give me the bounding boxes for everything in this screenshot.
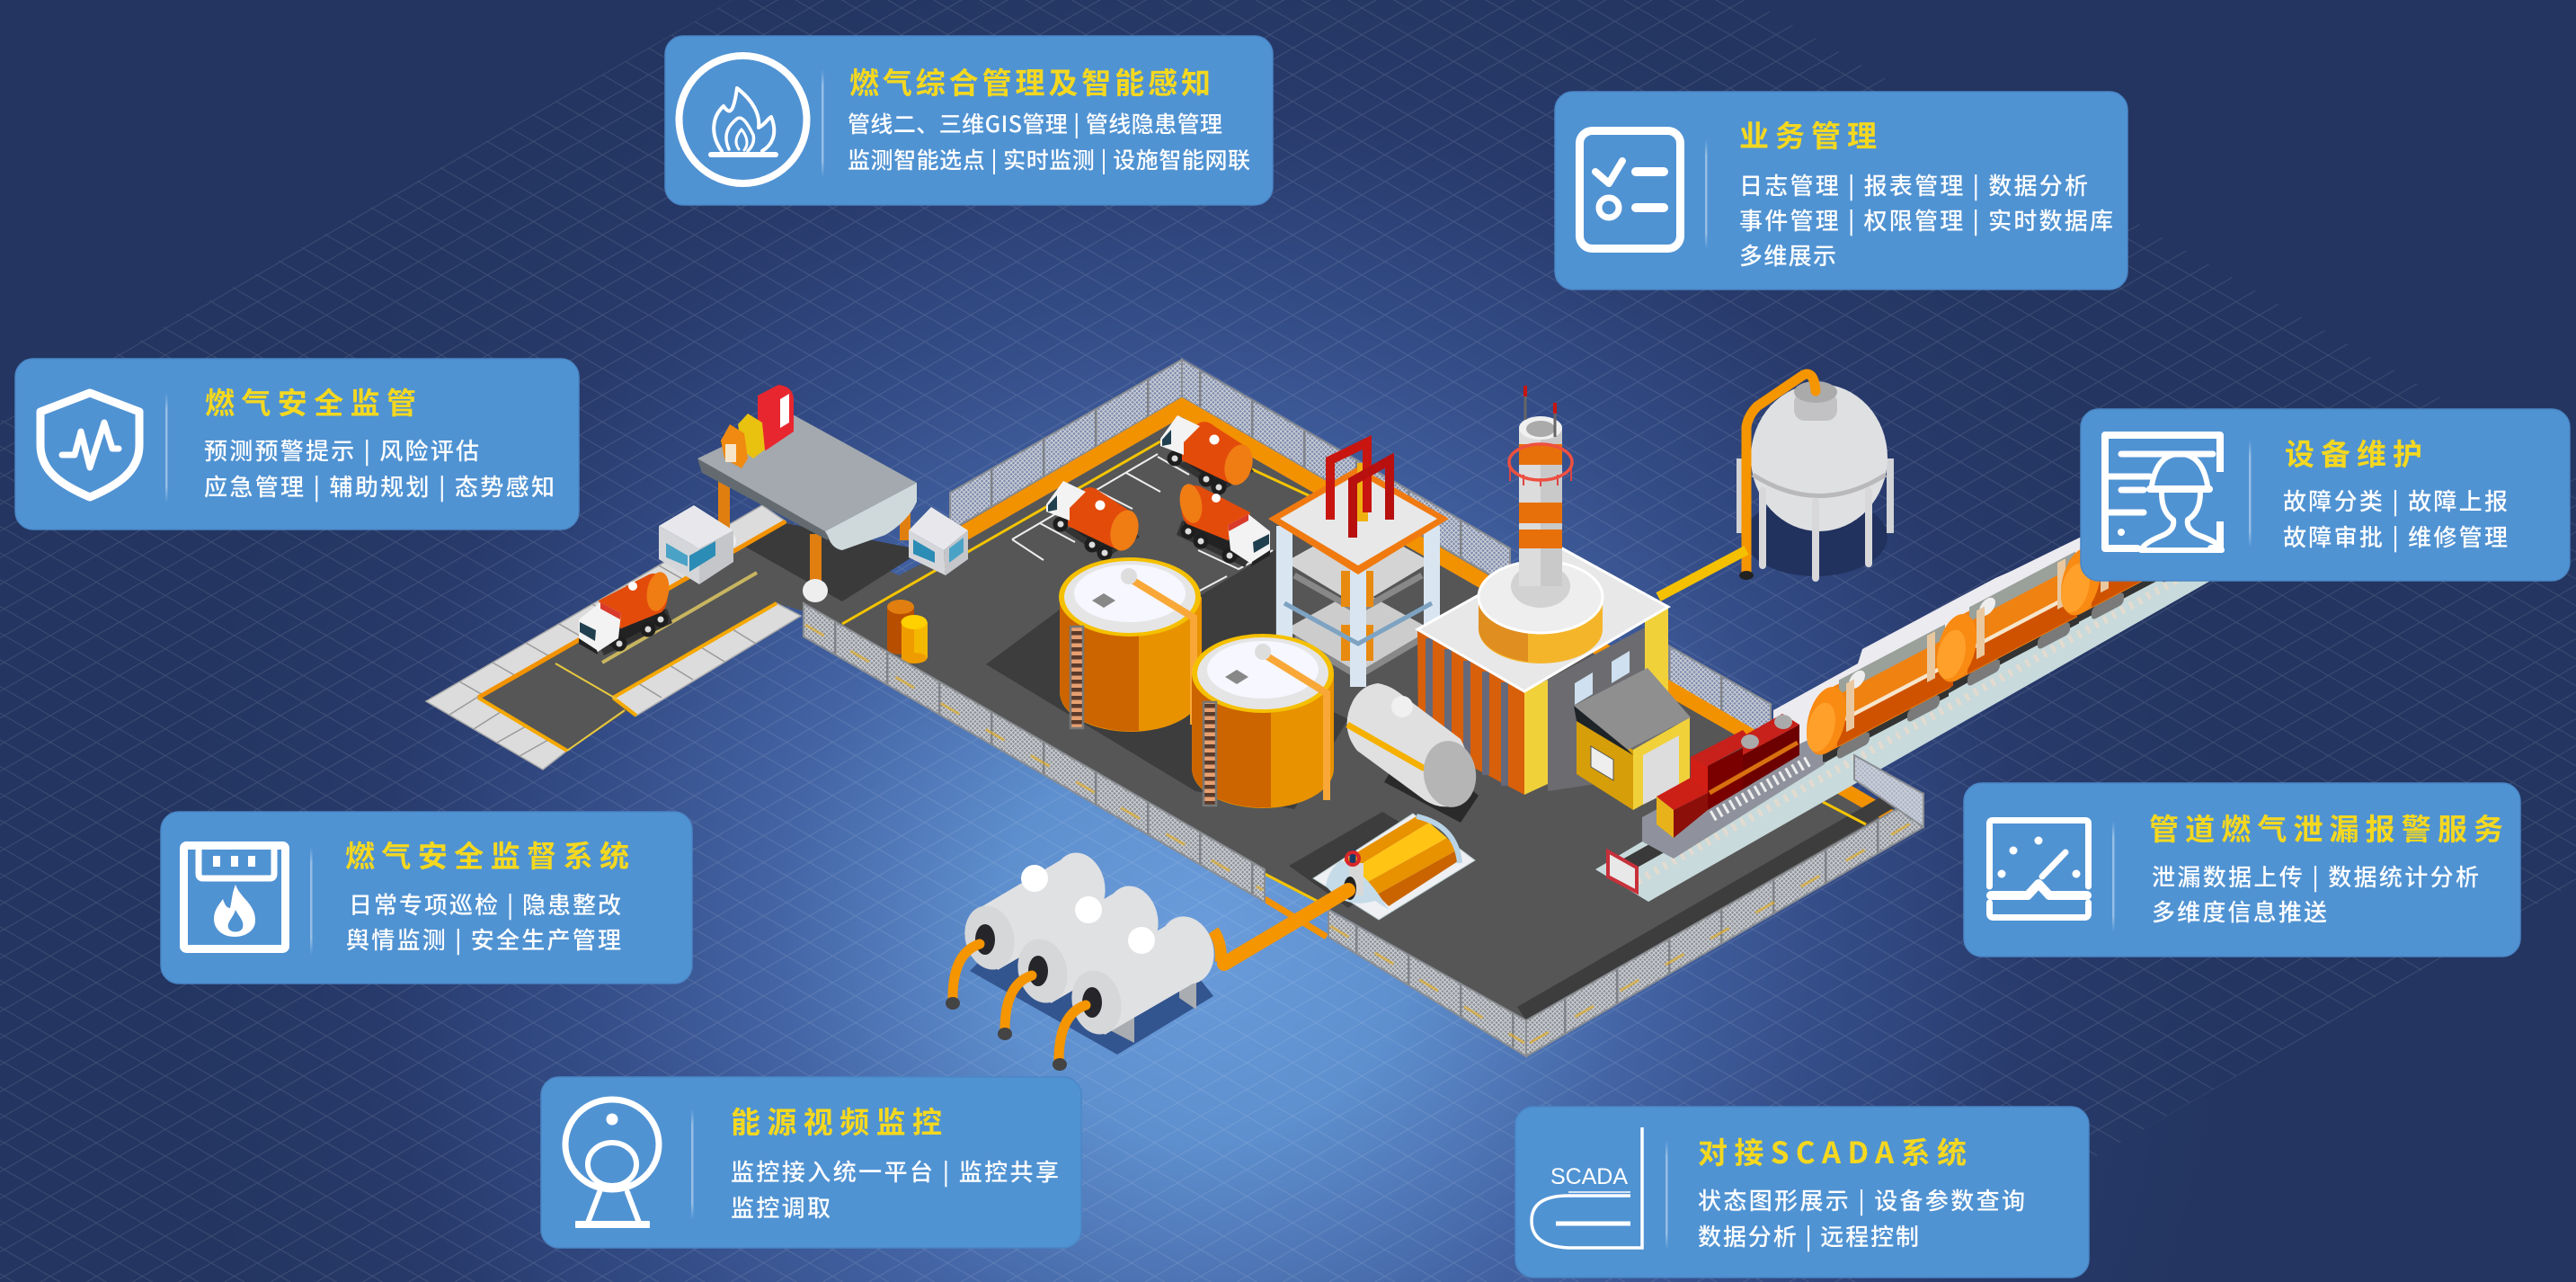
ground platform and road (478, 397, 1896, 1020)
panel: 燃气安全监管 (15, 359, 579, 530)
large orange storage tanks (1059, 557, 1334, 808)
text block (204, 433, 555, 503)
panel: 管道燃气泄漏报警服务 (1964, 783, 2520, 957)
tank wagons (1807, 480, 2208, 776)
text block: 数据分析 | 远程控制 (1698, 1219, 1919, 1252)
guard booths (659, 505, 968, 584)
heading: 设备维护 (2285, 431, 2422, 474)
text block: 预测预警提示 | 风险评估 (204, 433, 479, 467)
panel: 对接SCADA系统 (1515, 1107, 2089, 1278)
icon: SCADA book (1532, 1127, 1642, 1248)
text block (1739, 168, 2113, 272)
back fences (950, 360, 1771, 743)
gas sphere storage (1658, 374, 1890, 597)
rail track bed (1595, 530, 2220, 902)
text block (731, 1154, 1059, 1224)
icon: pressure gauge (1990, 820, 2089, 917)
three white storage cylinders (946, 847, 1348, 1071)
text block: 状态图形展示 | 设备参数查询 (1698, 1183, 2025, 1216)
text block: 多维展示 (1739, 238, 1836, 272)
observation frame structure (1268, 442, 1449, 687)
front fences (804, 603, 1923, 1056)
panel: 燃气综合管理及智能感知 (665, 36, 1273, 205)
text block: 应急管理 | 辅助规划 | 态势感知 (204, 469, 555, 503)
chimney tower (1479, 386, 1603, 663)
text block (346, 887, 621, 956)
icon: webcam (565, 1099, 659, 1228)
road markings (555, 441, 1866, 937)
text block: 故障分类 | 故障上报 (2283, 484, 2508, 517)
text block: 日常专项巡检 | 隐患整改 (349, 887, 621, 921)
heading: 管道燃气泄漏报警服务 (2149, 806, 2503, 849)
text block: 舆情监测 | 安全生产管理 (346, 922, 621, 956)
icon: fuel cans on canopy (721, 385, 794, 468)
text block (1698, 1183, 2025, 1252)
panel: 能源视频监控 (541, 1077, 1081, 1248)
icon: flame in circle (680, 56, 807, 183)
text block (2283, 484, 2508, 553)
text block: 监控调取 (731, 1190, 831, 1224)
text block: 多维度信息推送 (2152, 895, 2327, 928)
gate canopy (697, 385, 917, 602)
text block: 事件管理 | 权限管理 | 实时数据库 (1739, 203, 2113, 236)
icon: checklist (1580, 131, 1681, 248)
heading: 业务管理 (1739, 112, 1877, 156)
text block: 故障审批 | 维修管理 (2283, 520, 2508, 553)
fuel trucks (579, 415, 1270, 655)
heading: 对接SCADA系统 (1698, 1129, 1967, 1172)
icon: SCADA book: SCADA (1550, 1164, 1628, 1189)
text block: 监测智能选点 | 实时监测 | 设施智能网联 (848, 143, 1250, 175)
heading: 燃气安全监督系统 (345, 832, 629, 876)
text block: 泄漏数据上传 | 数据统计分析 (2152, 859, 2479, 893)
icon: stove with flame (183, 845, 286, 949)
panel: 设备维护 (2081, 409, 2570, 581)
heading: 燃气综合管理及智能感知 (849, 59, 1211, 102)
icon: shield with pulse (40, 393, 139, 497)
text block (848, 107, 1250, 175)
red locomotive (1642, 714, 1825, 859)
heading: 燃气安全监管 (205, 379, 416, 423)
text block (2152, 859, 2479, 928)
panel: 燃气安全监督系统 (161, 812, 692, 984)
oil barrels (887, 600, 928, 663)
heading: 能源视频监控 (731, 1099, 942, 1142)
orange pump vessel (1313, 814, 1475, 920)
main building (1417, 548, 1668, 795)
panel: 业务管理 (1555, 92, 2127, 289)
horizontal white tank (1347, 683, 1480, 823)
yellow gatehouse (1574, 668, 1691, 810)
paving tiles (426, 505, 801, 770)
text block: 管线二、三维GIS管理 | 管线隐患管理 (848, 107, 1222, 139)
text block: 监控接入统一平台 | 监控共享 (731, 1154, 1059, 1188)
text block: 日志管理 | 报表管理 | 数据分析 (1739, 168, 2088, 201)
icon: worker and document (2105, 435, 2224, 550)
